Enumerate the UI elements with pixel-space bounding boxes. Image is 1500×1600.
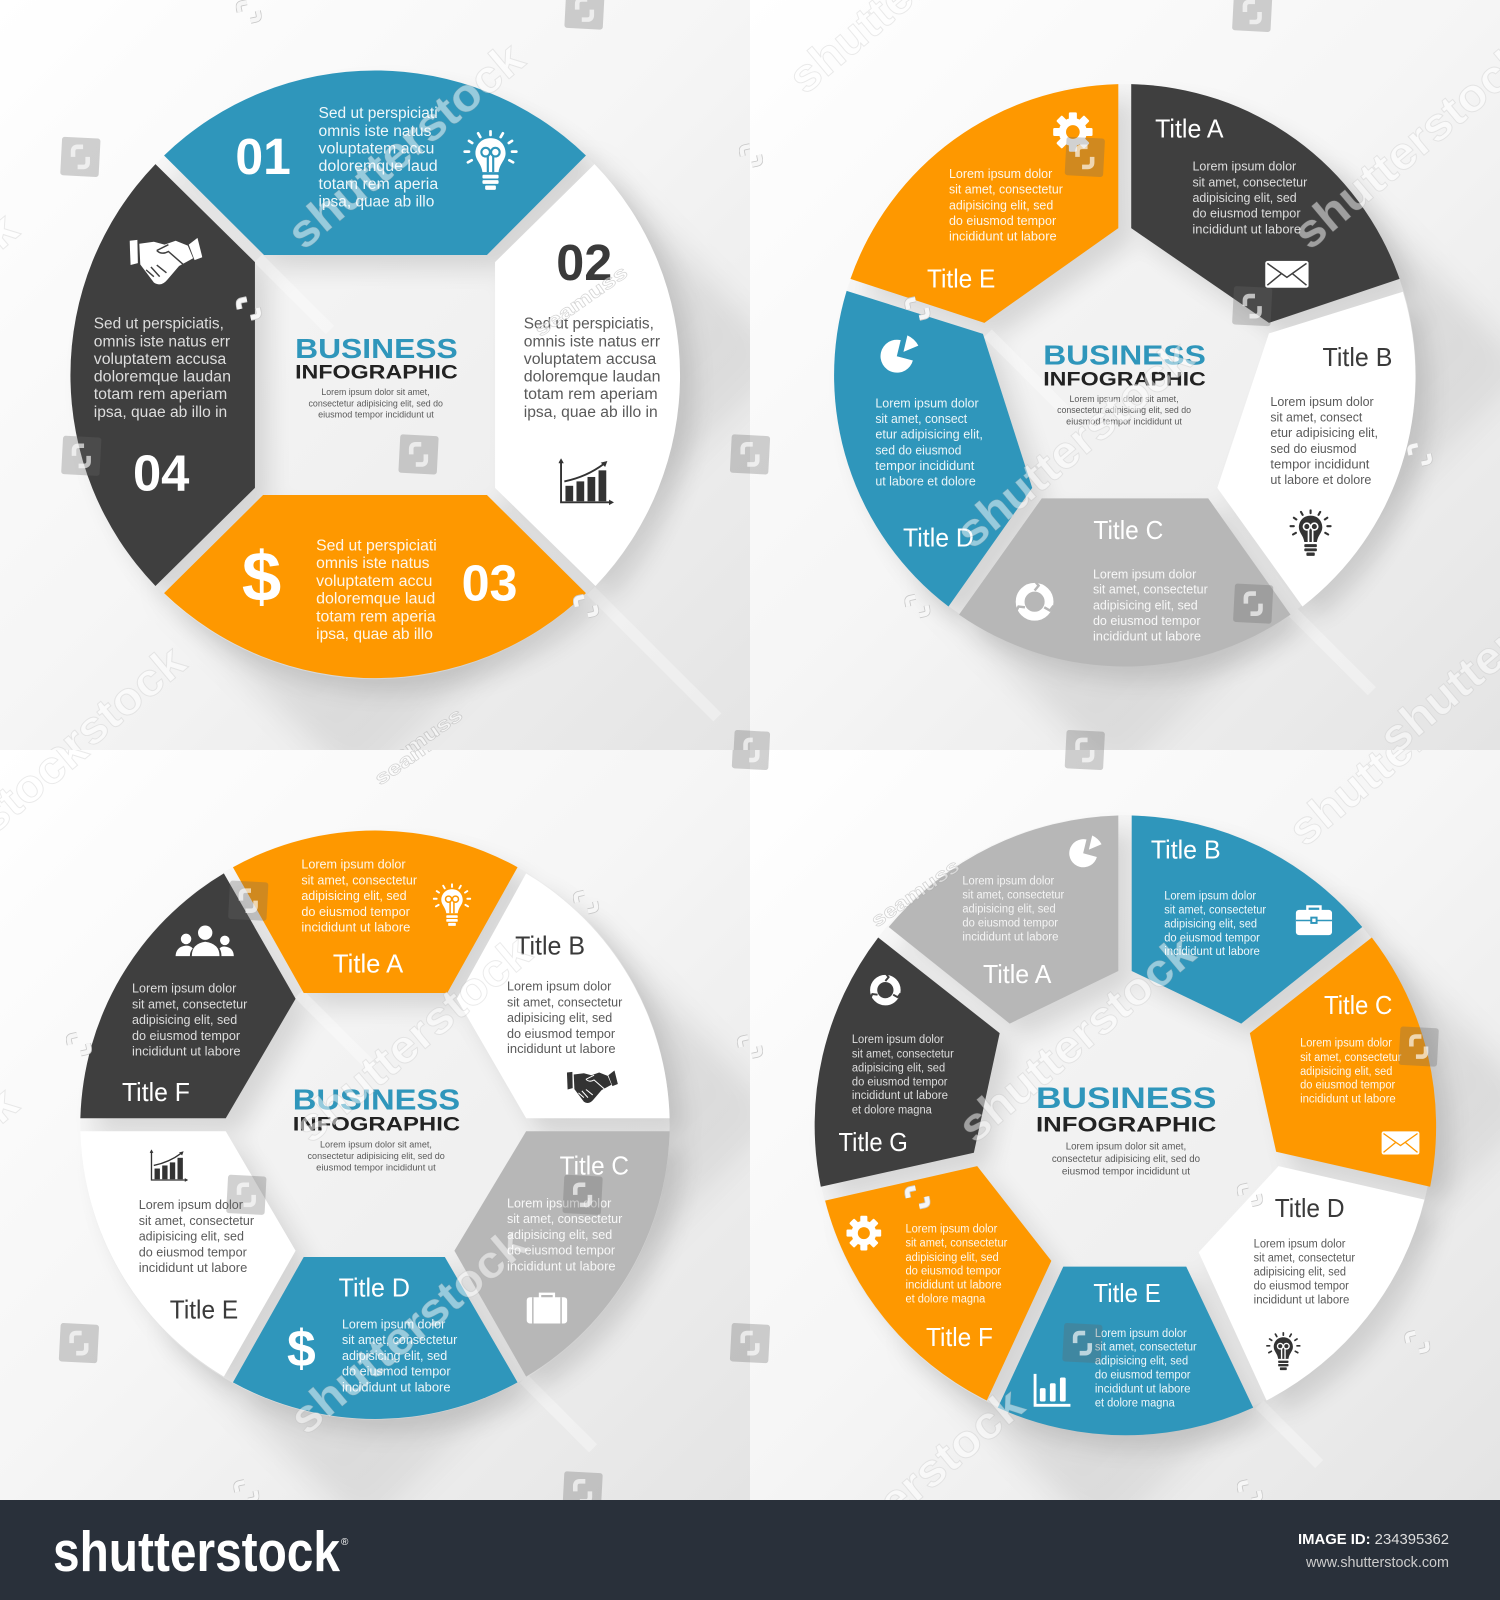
segment C text [507,1195,623,1273]
segment G dark [815,938,1000,1187]
panel: six-segment cycle diagram [0,750,750,1500]
segment D text [342,1316,458,1394]
segment 01 text: omnis iste natus [319,123,432,140]
icon: briefcase [1296,906,1332,935]
segment B text [507,979,623,1056]
segment D text: Lorem ipsum dolor [1254,1237,1346,1250]
segment C text [1093,566,1208,643]
icon: growth chart [150,1149,188,1182]
segment C text [1300,1037,1402,1106]
segment D text: sit amet, consectetur [1254,1251,1355,1264]
segment E blue [998,1267,1253,1435]
watermarks: shutterstock [945,330,1203,558]
segment G text [852,1033,954,1117]
title B: Title B [1151,837,1221,865]
segment B text: tempor incididunt [1270,456,1370,471]
segment E text: sit amet, consectetur [949,182,1063,197]
icon: pie chart [1069,836,1102,867]
segment F text: et dolore magna [905,1292,986,1305]
center heading: eiusmod tempor incididunt ut [1066,416,1182,427]
segment 02 text: totam rem aperiam [524,386,658,403]
segment D text: incididunt ut labore [342,1379,451,1394]
segment F text: sit amet, consectetur [132,996,248,1011]
segment E text: adipisicing elit, sed [139,1229,244,1244]
segment 02 text: voluptatem accusa [524,351,657,368]
segment 04 text: totam rem aperiam [94,386,227,403]
segment A dark [1131,84,1400,323]
segment D text: do eiusmod tempor [342,1364,451,1379]
center heading: consectetur adipisicing elit, sed do [1057,405,1191,416]
segment F text: adipisicing elit, sed [132,1012,237,1027]
segment B white [457,873,670,1118]
segment C text: incididunt ut labore [1300,1093,1396,1106]
title E: Title E [1093,1280,1161,1308]
segment 02 text: ipsa, quae ab illo in [524,404,658,421]
segment D blue [233,1257,518,1419]
watermarks: seamuss [531,262,632,341]
icon: gear [1053,112,1093,152]
segment A text [962,874,1064,943]
watermarks: shutterstock [948,925,1205,1152]
center heading [1043,339,1206,427]
icon: handshake [130,238,202,284]
center heading: BUSINESS [295,333,458,364]
segment A text: sit amet, consectetur [1192,175,1308,190]
segment C gray [959,498,1290,666]
title B: Title B [1323,344,1392,372]
segment B text: Lorem ipsum dolor [507,979,612,994]
title C: Title C [1093,517,1163,545]
segment 04 dark [70,164,255,586]
segment E text: do eiusmod tempor [139,1245,247,1260]
icon: growth chart [558,458,614,505]
segment D text: etur adipisicing elit, [875,427,983,442]
segment E text: sit amet, consectetur [139,1213,255,1228]
segment E text: adipisicing elit, sed [1095,1355,1188,1368]
segment 02 text: doloremque laudan [524,369,661,386]
title E: Title E [927,265,995,293]
center heading: INFOGRAPHIC [1043,370,1206,391]
segment G text: incididunt ut labore [852,1089,948,1102]
segment C text: Lorem ipsum dolor [1300,1037,1392,1050]
segment B text: sed do eiusmod [1270,441,1357,456]
segment E white [80,1131,296,1377]
center heading: consectetur adipisicing elit, sed do [308,1151,445,1162]
segment C text: adipisicing elit, sed [1093,597,1198,612]
segment F text: do eiusmod tempor [132,1028,241,1043]
segment C text: sit amet, consectetur [507,1211,623,1226]
segment D text: sit amet, consectetur [342,1332,458,1347]
segment 04 text: omnis iste natus err [94,333,230,350]
title A: Title A [1155,115,1224,143]
segment E text: Lorem ipsum dolor [139,1197,244,1212]
icon: dollar sign: $ [242,538,281,617]
segment B text: incididunt ut labore [1164,945,1260,958]
segment B text: adipisicing elit, sed [1164,917,1257,930]
segment E text [949,166,1063,244]
segment A text: sit amet, consectetur [962,888,1064,901]
segment E text: incididunt ut labore [139,1260,247,1275]
center heading: consectetur adipisicing elit, sed do [309,399,443,410]
segment A text: Lorem ipsum dolor [962,874,1054,887]
segment D text: do eiusmod tempor [1254,1280,1349,1293]
segment C text: incididunt ut labore [1093,628,1201,643]
segment C text: do eiusmod tempor [507,1243,616,1258]
footer bar [0,1500,1500,1600]
website url: www.shutterstock.com [1305,1554,1449,1571]
segment E text: do eiusmod tempor [1095,1369,1191,1382]
panel: seven-segment cycle diagram [750,750,1500,1500]
segment C gray [454,1131,670,1377]
icon: gear [846,1216,881,1250]
number 03: 03 [462,555,518,612]
segment F text: Lorem ipsum dolor [132,981,237,996]
center heading: INFOGRAPHIC [295,362,458,383]
segment B text: do eiusmod tempor [1164,931,1260,944]
segment 01 text [319,105,439,211]
segment E text: et dolore magna [1095,1397,1175,1410]
title C: Title C [1324,992,1392,1020]
segment 03 text: ipsa, quae ab illo [316,626,433,643]
icon: handshake [567,1070,618,1103]
segment 03 orange [164,495,586,678]
segment G text: do eiusmod tempor [852,1075,948,1088]
segment D white [1199,1166,1424,1401]
segment 02 text [524,316,661,421]
icon: light bulb [465,131,516,190]
segment B text [1164,890,1266,958]
center heading: BUSINESS [1043,339,1206,370]
center heading: INFOGRAPHIC [293,1114,460,1136]
segment B blue [1132,816,1362,1024]
center heading: INFOGRAPHIC [1036,1113,1216,1137]
segment F text: adipisicing elit, sed [905,1251,999,1264]
segment B text: sit amet, consect [1270,409,1363,424]
segment B text: sit amet, consectetur [507,994,623,1009]
icon: dollar sign: $ [287,1319,316,1377]
icon: bar chart [1035,1374,1070,1405]
segment D text [875,396,983,488]
segment C text: do eiusmod tempor [1300,1079,1395,1092]
segment F text: incididunt ut labore [132,1044,241,1059]
icon: light bulb [1290,510,1331,556]
title A: Title A [333,950,404,978]
footer logo: shutterstock [53,1520,340,1584]
center heading [1036,1082,1216,1177]
watermarks [0,0,773,862]
segment B text: Lorem ipsum dolor [1164,890,1256,903]
icon: light bulb [1267,1333,1300,1370]
segment C orange [1250,938,1436,1187]
segment A text [301,857,418,935]
segment D text: tempor incididunt [875,458,975,473]
segment G text: sit amet, consectetur [852,1048,954,1061]
center heading: consectetur adipisicing elit, sed do [1052,1153,1200,1165]
segment D text: incididunt ut labore [1254,1293,1349,1306]
watermarks [0,711,772,1512]
segment D blue [834,291,1032,607]
segment A text: incididunt ut labore [1192,221,1301,236]
segment A text: Lorem ipsum dolor [1192,159,1297,174]
segment F text [905,1223,1007,1305]
segment 04 text: ipsa, quae ab illo in [94,404,227,421]
segment B text: etur adipisicing elit, [1270,425,1378,440]
segment 01 blue [164,70,586,255]
segment D text: ut labore et dolore [875,473,976,488]
title D: Title D [339,1275,410,1303]
segment F text: Lorem ipsum dolor [905,1223,997,1236]
icon: suitcase [527,1294,567,1324]
watermarks [730,0,1500,770]
segment F text [132,981,248,1059]
segment C text: sit amet, consectetur [1093,582,1208,597]
segment 02 text: omnis iste natus err [524,333,660,350]
segment 03 text: Sed ut perspiciati [316,538,437,555]
center heading: eiusmod tempor incididunt ut [316,1162,436,1173]
segment C text: sit amet, consectetur [1300,1051,1402,1064]
segment 02 white [495,164,680,586]
segment 03 text: omnis iste natus [316,555,430,572]
segment D text: Lorem ipsum dolor [342,1316,446,1331]
title D: Title D [1275,1195,1345,1223]
segment 01 text: Sed ut perspiciati [319,105,438,122]
segment A text: do eiusmod tempor [1192,206,1301,221]
segment B white [1217,292,1415,607]
segment 01 text: doloremque laud [319,158,438,175]
panel: five-segment cycle diagram [750,0,1500,750]
segment C text: Lorem ipsum dolor [507,1195,612,1210]
segment A text: do eiusmod tempor [962,916,1058,929]
segment 03 text: voluptatem accu [316,573,432,590]
segment E text: incididunt ut labore [1095,1382,1191,1395]
segment 02 text: Sed ut perspiciatis, [524,316,654,333]
center heading: eiusmod tempor incididunt ut [318,410,434,421]
segment D text: Lorem ipsum dolor [875,396,979,411]
segment E text [139,1197,255,1275]
icon: cycle arrows [870,973,901,1002]
number 02: 02 [556,234,612,291]
segment A text: adipisicing elit, sed [301,888,407,903]
segment F text: sit amet, consectetur [905,1236,1007,1249]
segment E text: adipisicing elit, sed [949,198,1053,213]
watermarks: shutterstock [284,925,541,1152]
segment A gray [889,816,1118,1024]
segment G text: Lorem ipsum dolor [852,1033,944,1046]
segment C text: Lorem ipsum dolor [1093,566,1197,581]
segment D text [1254,1237,1355,1306]
segment 03 text [316,538,437,643]
segment E text: do eiusmod tempor [949,213,1057,228]
segment E text [1095,1327,1197,1410]
segment G text: adipisicing elit, sed [852,1061,945,1074]
icon: light bulb [434,884,470,926]
segment F dark [80,873,296,1118]
segment A text: adipisicing elit, sed [1192,190,1297,205]
icon: cycle arrows [1016,581,1053,616]
segment 01 text: voluptatem accu [319,141,434,158]
center heading: Lorem ipsum dolor sit amet, [1070,394,1179,405]
segment E text: incididunt ut labore [949,229,1057,244]
segment B text: adipisicing elit, sed [507,1010,612,1025]
watermarks: shutterstock [279,1216,536,1444]
image id: IMAGE ID: 234395362 [1298,1531,1449,1548]
segment B text: do eiusmod tempor [507,1026,616,1041]
segment E text: Lorem ipsum dolor [1095,1327,1187,1340]
segment F orange [825,1166,1051,1401]
segment G text: et dolore magna [852,1104,932,1117]
icon: pie chart [881,335,918,373]
center heading: Lorem ipsum dolor sit amet, [1066,1140,1186,1152]
segment C text: adipisicing elit, sed [507,1227,612,1242]
segment C text: incididunt ut labore [507,1258,616,1273]
segment 03 text: totam rem aperia [316,608,436,625]
segment F text: incididunt ut labore [905,1279,1002,1292]
title G: Title G [838,1129,908,1157]
title A: Title A [983,961,1052,989]
center heading [293,1085,460,1173]
segment B text: Lorem ipsum dolor [1270,394,1374,409]
center heading [295,333,458,421]
segment B text [1270,394,1378,487]
segment A orange [233,831,518,993]
segment 04 text: voluptatem accusa [94,351,227,368]
segment F text: do eiusmod tempor [905,1265,1001,1278]
segment A text: do eiusmod tempor [301,904,411,919]
segment B text: sit amet, consectetur [1164,904,1266,917]
segment D text: sed do eiusmod [875,442,961,457]
number 04: 04 [133,445,189,502]
title E: Title E [170,1297,238,1325]
panel: four-segment cycle diagram [0,0,750,750]
watermarks: shutterstock [277,31,534,259]
segment 04 text: Sed ut perspiciatis, [94,316,224,333]
segment C text: do eiusmod tempor [1093,613,1201,628]
segment D text: adipisicing elit, sed [342,1348,447,1363]
segment E text: Lorem ipsum dolor [949,166,1053,181]
center heading: BUSINESS [293,1085,460,1117]
segment A text: incididunt ut labore [962,930,1059,943]
number 01: 01 [235,128,291,185]
segment D text: sit amet, consect [875,411,968,426]
segment A text: Lorem ipsum dolor [301,857,406,872]
title B: Title B [515,933,585,961]
title F: Title F [926,1324,993,1352]
title F: Title F [122,1079,190,1107]
segment 04 text [94,316,231,421]
segment A text: adipisicing elit, sed [962,903,1056,916]
segment 04 text: doloremque laudan [94,369,231,386]
title D: Title D [903,525,974,553]
segment D text: adipisicing elit, sed [1254,1266,1346,1279]
segment 01 text: totam rem aperia [319,176,439,193]
segment A text: incididunt ut labore [301,920,410,935]
icon: envelope [1265,261,1309,288]
center heading: Lorem ipsum dolor sit amet, [321,387,430,398]
segment E text: sit amet, consectetur [1095,1341,1197,1354]
icon: envelope [1382,1131,1419,1155]
segment B text: incididunt ut labore [507,1041,616,1056]
title C: Title C [560,1152,629,1180]
segment 03 text: doloremque laud [316,591,435,608]
segment A text: sit amet, consectetur [301,872,418,887]
footer logo: ® [341,1537,349,1548]
watermarks [730,628,1500,1600]
center heading: eiusmod tempor incididunt ut [1062,1165,1190,1177]
segment B text: ut labore et dolore [1270,472,1371,487]
watermarks: seamuss [868,856,964,932]
icon: people [176,926,234,956]
segment E orange [850,84,1118,323]
center heading: BUSINESS [1036,1082,1216,1115]
segment 01 text: ipsa, quae ab illo [319,194,434,211]
segment C text: adipisicing elit, sed [1300,1065,1392,1078]
center heading: Lorem ipsum dolor sit amet, [320,1139,432,1150]
segment A text [1192,159,1308,236]
